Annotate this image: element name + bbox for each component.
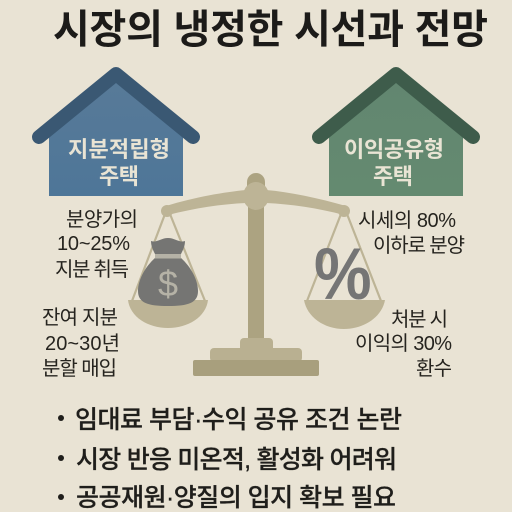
left notes: 분양 조건: 분양가의 [66,208,138,231]
left notes: 분양 조건 [55,208,138,281]
right notes: 분양 조건: 이하로 분양 [373,234,465,257]
left notes: 분양 조건: 지분 취득 [55,258,129,281]
left notes: 매입 조건 [42,306,120,380]
bullet 1: 임대료 부담·수익 공유 조건 논란 [75,406,402,434]
icon: percent sign: % [314,232,372,315]
house: 이익공유형 주택 [319,74,473,196]
right notes: 분양 조건: 시세의 80% [358,209,456,232]
right notes: 분양 조건 [358,209,465,257]
right pan [304,300,385,329]
bullet 3: 공공재원·양질의 입지 확보 필요 [76,484,396,512]
icon: money bag [138,238,198,306]
right notes: 환수 조건 [355,308,452,380]
scale beam [166,190,346,215]
left notes: 매입 조건: 분할 매입 [42,357,117,380]
house: 이익공유형 주택: 이익공유형 [344,137,444,162]
house: 지분적립형 주택 [39,74,193,196]
right notes: 환수 조건: 환수 [416,357,452,380]
scale post [248,200,264,342]
house: 지분적립형 주택: 지분적립형 [68,137,170,162]
icon: money bag: $ [158,263,178,304]
left notes: 매입 조건: 20~30년 [45,332,120,355]
right notes: 환수 조건: 이익의 30% [355,332,452,355]
bullet list [58,406,402,512]
house: 이익공유형 주택: 주택 [373,164,413,189]
left pan [128,300,208,328]
scale knob [247,173,265,197]
left notes: 분양 조건: 10~25% [57,233,130,255]
right notes: 환수 조건: 처분 시 [391,308,448,331]
left notes: 매입 조건: 잔여 지분 [42,306,118,329]
balance scale [128,173,385,376]
bullet 2: 시장 반응 미온적, 활성화 어려워 [76,446,397,474]
house: 지분적립형 주택: 주택 [99,164,139,189]
title: 시장의 냉정한 시선과 전망 [53,8,488,52]
left pan strings [132,214,205,301]
right pan strings [307,214,381,301]
scale base [193,338,319,376]
